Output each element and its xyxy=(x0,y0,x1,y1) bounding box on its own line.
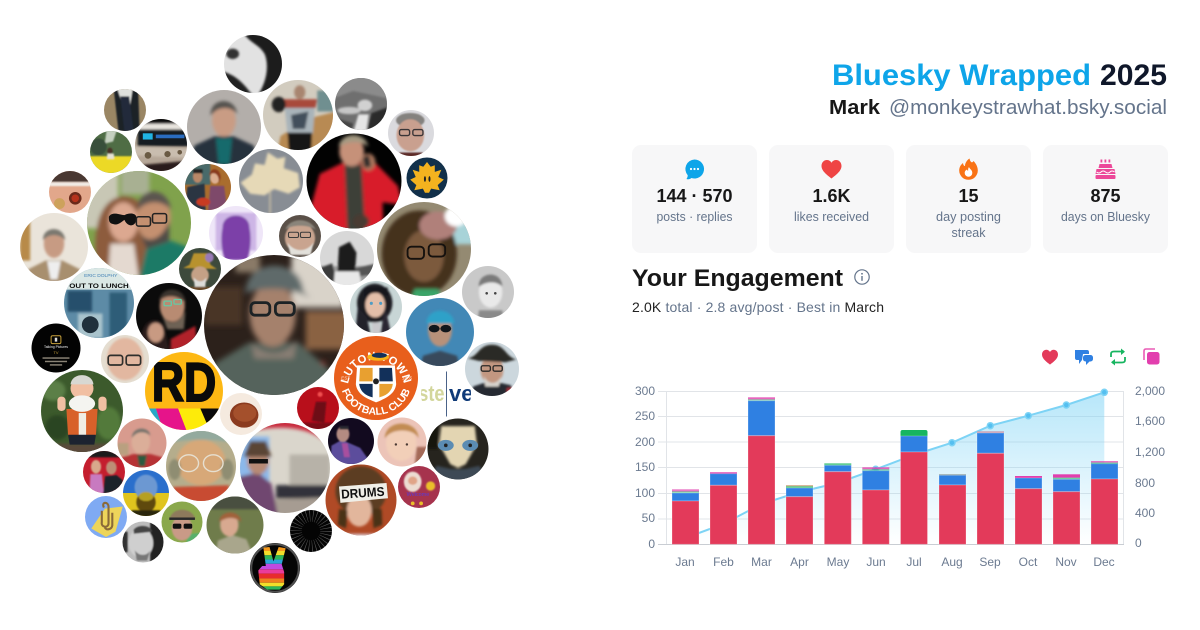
avatar: grey haired man xyxy=(187,90,261,168)
avatar: DRUMS headband: DRUMS xyxy=(341,484,385,502)
bars: Feb xyxy=(710,472,737,544)
avatar: Luton Town Football Club badge xyxy=(334,336,418,420)
avatar: earrings on hand xyxy=(49,171,91,213)
header: user name and handle: @monkeystrawhat.bsky.social xyxy=(889,97,1167,119)
month labels: Apr xyxy=(790,555,809,569)
avatar: woman with long hair and sun flare xyxy=(377,202,476,301)
avatar: Luton Town Football Club badge: EST xyxy=(341,376,350,381)
header: title: Bluesky Wrapped xyxy=(832,59,1091,92)
avatar: black and white boy xyxy=(462,266,514,321)
avatar: main profile photo man in cap xyxy=(204,255,351,402)
avatar: yellow maple leaf xyxy=(406,158,448,198)
month labels: May xyxy=(827,555,849,569)
avatar: dark red stage xyxy=(297,387,339,429)
avatar: couple on red seats xyxy=(81,449,127,495)
avatar: man in red jacket xyxy=(306,134,402,233)
month labels: Jul xyxy=(906,555,922,569)
avatar: woman with dark hair xyxy=(350,281,402,336)
right axis labels: 1,600 xyxy=(1135,414,1165,428)
avatar cluster xyxy=(20,35,519,593)
panel: day posting streak xyxy=(906,145,1031,253)
avatar: Luton Town Football Club badge: LUTON TOWN xyxy=(340,352,412,384)
avatar: selfie couple on black xyxy=(136,283,202,352)
avatar: blurry painted face with glasses xyxy=(162,428,240,504)
avatar: Luton Town Football Club badge: FOOTBALL CLUB xyxy=(342,388,410,415)
icon: legend replies xyxy=(1075,350,1093,365)
avatar: couple with sunglasses xyxy=(87,171,191,275)
avatar: steve wordmark xyxy=(421,372,471,416)
avatar: hifi amplifier xyxy=(135,119,187,171)
avatar: purple hair illustration xyxy=(209,206,263,260)
icon: chat bubble xyxy=(685,159,704,179)
bars: Jan xyxy=(672,489,699,544)
avatar: brown button xyxy=(220,393,262,435)
header: user name and handle: Mark xyxy=(829,97,881,119)
right axis labels: 2,000 xyxy=(1135,384,1165,398)
panel: posts and replies: 144 · 570 xyxy=(656,186,732,206)
month labels: Jun xyxy=(866,555,886,569)
avatar: man in dark hat xyxy=(465,342,519,399)
legend icons xyxy=(1042,348,1160,366)
month labels: Jan xyxy=(675,555,695,569)
avatar: paperclip xyxy=(85,496,127,538)
avatar: garden gnome xyxy=(41,370,123,452)
avatar: black and white woman xyxy=(224,35,282,93)
avatar: painted man in yellow hat xyxy=(179,248,221,293)
left axis labels: 200 xyxy=(635,435,655,449)
grid lines xyxy=(658,391,1124,544)
avatar: bald man with glasses xyxy=(101,335,149,383)
bars: Oct xyxy=(1015,476,1042,544)
avatar: Talking Pictures TV logo xyxy=(32,324,80,372)
avatar: man with Ukraine flag overlay xyxy=(123,470,169,518)
icon: heart xyxy=(822,160,842,178)
right axis labels: 1,200 xyxy=(1135,445,1165,459)
avatar: alien with blue eyes xyxy=(428,418,488,480)
left axis labels xyxy=(635,384,655,551)
header: title: 2025 xyxy=(1100,59,1167,92)
bars: Aug xyxy=(939,474,966,544)
avatar: RD logo: RD xyxy=(152,352,216,413)
avatar: steve wordmark: ste xyxy=(418,381,444,406)
avatar: black and white older man xyxy=(120,519,167,565)
left axis labels: 50 xyxy=(642,511,655,525)
month labels: Feb xyxy=(713,555,734,569)
icon: birthday cake xyxy=(1096,160,1116,179)
month labels: Oct xyxy=(1019,555,1038,569)
avatar: Out To Lunch album: OUT TO LUNCH xyxy=(69,283,129,290)
avatar: black and white figure on beach xyxy=(320,231,374,285)
panel: days on Bluesky: days on Bluesky xyxy=(1061,210,1151,224)
month labels: Sep xyxy=(979,555,1001,569)
panel: day posting streak: streak xyxy=(952,226,986,240)
right axis labels: 400 xyxy=(1135,506,1155,520)
avatar: man in tan shirt xyxy=(20,213,88,284)
bars: Apr xyxy=(786,485,813,544)
month labels: Dec xyxy=(1093,555,1115,569)
avatar: pale leaf xyxy=(239,149,303,215)
panel: likes received xyxy=(769,145,894,253)
avatar: Luton Town Football Club badge: 1885 xyxy=(402,376,413,381)
chart: monthly engagement stacked bars with cumulative line xyxy=(635,384,1165,569)
icon: info xyxy=(855,270,869,284)
avatar: blond boy xyxy=(378,418,429,469)
heading: Your Engagement: Your Engagement xyxy=(632,265,843,292)
bars: Jul xyxy=(900,430,928,544)
bars: Dec xyxy=(1091,461,1118,544)
avatar: bearded man with glasses xyxy=(279,215,321,257)
avatar: old man in glasses xyxy=(388,110,434,158)
left axis labels: 250 xyxy=(635,409,655,423)
month labels: Aug xyxy=(941,555,963,569)
icon: legend likes xyxy=(1042,350,1058,365)
panel: posts and replies xyxy=(632,145,757,253)
panel: posts and replies: posts · replies xyxy=(656,210,732,224)
bars: May xyxy=(824,463,851,544)
avatar: Out To Lunch album: ERIC DOLPHY xyxy=(84,273,118,279)
panel: likes received: likes received xyxy=(794,210,869,224)
avatar: boy in field xyxy=(204,494,266,556)
cumulative area and line xyxy=(685,389,1107,544)
icon: flame xyxy=(959,158,978,180)
avatar: man in blue cap by sea xyxy=(406,298,474,369)
icon: legend quotes xyxy=(1144,349,1160,364)
bars: Nov xyxy=(1053,474,1080,544)
month labels xyxy=(675,555,1115,569)
avatar: DRUMS headband xyxy=(326,464,396,539)
avatar: Out To Lunch album xyxy=(64,268,134,342)
panel: day posting streak: 15 xyxy=(958,186,979,206)
bars: Jun xyxy=(862,467,889,544)
avatar: man on pink background xyxy=(118,418,166,470)
avatar: man in hat beside food truck xyxy=(236,418,334,518)
panel: days on Bluesky: 875 xyxy=(1090,186,1121,206)
left axis labels: 100 xyxy=(635,486,655,500)
avatar: Talking Pictures TV logo: TV xyxy=(53,350,59,355)
bars: Mar xyxy=(748,397,775,544)
right axis labels: 0 xyxy=(1135,536,1142,550)
icon: legend reposts xyxy=(1111,348,1125,366)
text: engagement summary: 2.0K total · 2.8 avg/post · Best in March xyxy=(632,299,884,315)
panel: day posting streak: day posting xyxy=(936,210,1001,224)
avatar: Talking Pictures TV logo: Talking Pictures xyxy=(44,345,68,349)
avatar: rainbow peace hand xyxy=(250,543,300,593)
avatar: RD logo xyxy=(145,352,223,430)
bars: Sep xyxy=(977,431,1004,544)
avatar: man in sunglasses and hat xyxy=(162,502,205,545)
left axis labels: 150 xyxy=(635,460,655,474)
left axis labels: 300 xyxy=(635,384,655,398)
panel: likes received: 1.6K xyxy=(812,186,851,206)
avatar: steve wordmark: ve xyxy=(449,381,473,406)
avatar: person in yellow field xyxy=(90,131,132,173)
month labels: Mar xyxy=(751,555,772,569)
avatar: black starburst xyxy=(290,510,332,552)
avatar: retro couple painting xyxy=(185,164,231,210)
right axis labels xyxy=(1135,384,1165,550)
avatar: black and white reclining woman xyxy=(335,78,387,130)
left axis labels: 0 xyxy=(648,537,655,551)
avatar: suit and tie xyxy=(104,87,146,133)
avatar: Santa greeting xyxy=(398,466,440,508)
panel: days on Bluesky xyxy=(1043,145,1168,253)
right axis labels: 800 xyxy=(1135,476,1155,490)
avatar: singer in purple suit xyxy=(328,418,374,466)
month labels: Nov xyxy=(1055,555,1077,569)
avatar: man with helmet xyxy=(263,80,336,154)
avatar: Santa greeting: Welcome xyxy=(407,492,429,498)
